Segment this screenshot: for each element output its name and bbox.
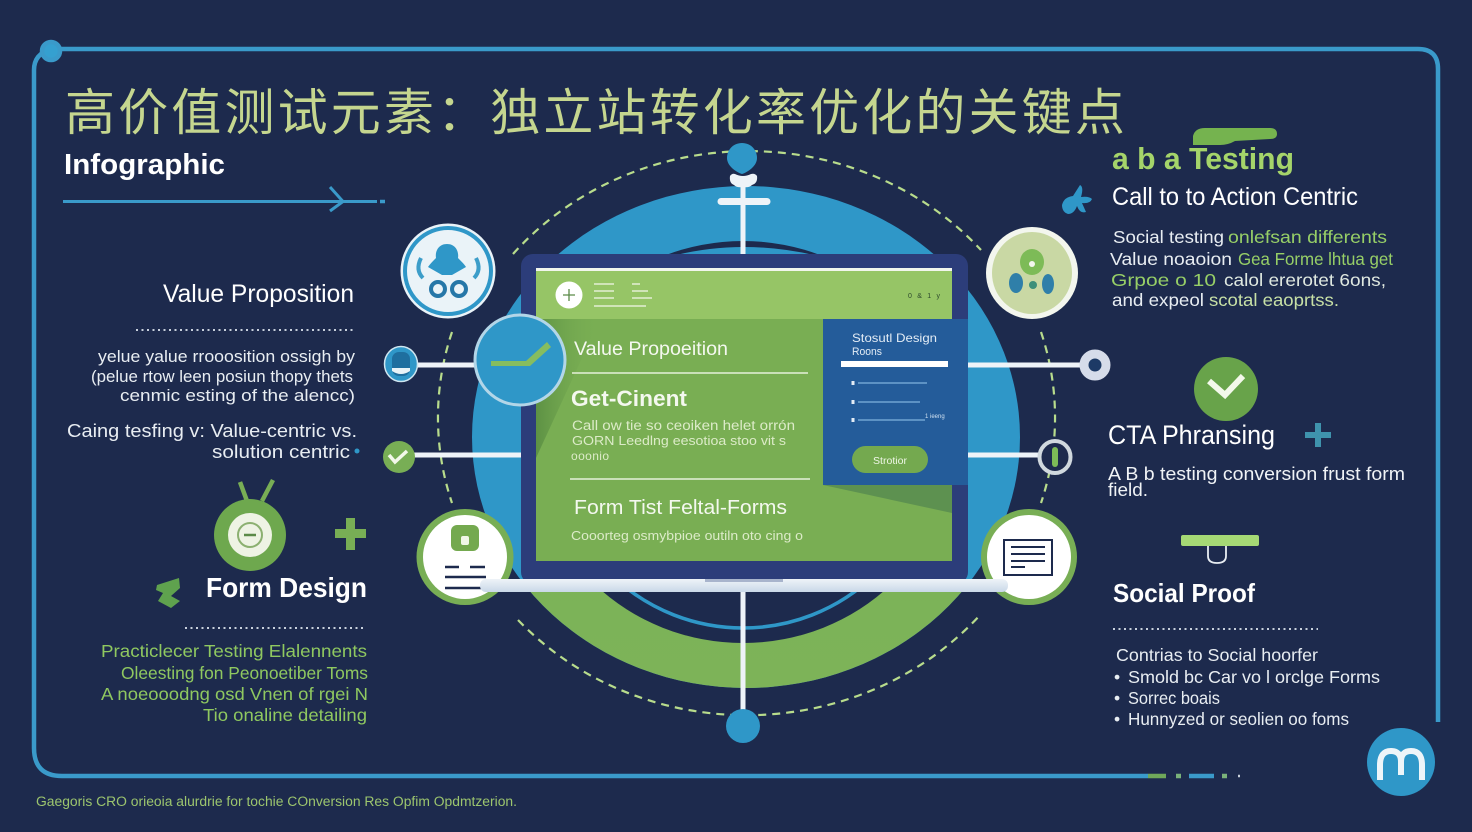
text block: form design copy: Practiclecer Testing Elalennents [101, 641, 367, 661]
icon: green check [1194, 357, 1258, 421]
icon: people badge [400, 224, 496, 318]
text block: value proposition copy: yelue yalue rrooosition ossigh by [98, 347, 356, 366]
text block: cta copy: field. [1108, 480, 1148, 500]
heading: social proof: Social Proof [1113, 578, 1255, 608]
icon: green squiggle [156, 578, 180, 608]
screen headings and copy: Get-Cinent [571, 386, 688, 411]
icon: document badge left [416, 509, 514, 605]
text block: ab testing copy [1110, 227, 1393, 310]
text block: ab testing copy: and expeol [1112, 290, 1204, 310]
laptop [521, 254, 968, 584]
form panel: Strotior [873, 456, 908, 467]
text block: cta copy [1108, 464, 1405, 500]
panel: form design [101, 572, 368, 725]
icon: small green check [383, 441, 415, 473]
panel: value proposition [67, 280, 360, 462]
heading: ab testing: a b a Testing [1112, 141, 1294, 176]
form panel: Stosutl Design [852, 331, 937, 345]
text block: social proof copy: • [1114, 667, 1120, 687]
dashed orbit [438, 151, 1055, 715]
heading: cta phrasing: CTA Phransing [1108, 420, 1275, 450]
text block: value proposition copy: solution centric [212, 442, 350, 462]
icon: small blue node [384, 346, 418, 382]
icon: green persona badge [986, 227, 1078, 319]
text block: social proof copy: • [1114, 688, 1120, 708]
laptop base [480, 579, 1008, 592]
screen headings and copy: Value Propoeition [574, 339, 728, 360]
icon: right ring node [1084, 354, 1106, 376]
text block: ab testing copy: Grpoe o 10 [1111, 270, 1216, 290]
node: bottom [726, 709, 760, 743]
screen headings and copy: Call ow tie so ceoiken helet orrón [572, 418, 795, 433]
screen header: 0 & 1 y [908, 293, 940, 300]
title: 高价值测试元素：独立站转化率优化的关键点 [65, 85, 1128, 141]
text block: social proof copy: Smold bc Car vo l orclge Forms [1128, 667, 1380, 687]
screen headings and copy: ooonio [571, 449, 609, 463]
text block: social proof copy: Sorrec boais [1128, 688, 1220, 708]
icon: green tab [1193, 128, 1277, 145]
icon: form target [214, 480, 286, 571]
central circle graphic [472, 186, 1020, 688]
icon: blue butterfly [1062, 185, 1092, 214]
form panel [823, 319, 968, 485]
screen headings and copy [570, 339, 810, 543]
form panel: Roons [852, 346, 882, 358]
text block: social proof copy: Hunnyzed or seolien oo foms [1128, 709, 1349, 729]
screen header [556, 282, 940, 308]
text block: value proposition copy: Caing tesfing v: Value-centric vs. [67, 421, 357, 441]
text block: form design copy [101, 641, 368, 725]
subheading: call to action: Call to to Action Centric [1112, 183, 1358, 211]
footer note: Gaegoris CRO orieoia alurdrie for tochie COnversion Res Opfim Opdmtzerion. [36, 794, 517, 809]
heading: value proposition: Value Proposition [163, 280, 354, 308]
icon: check on blue disc [475, 315, 565, 405]
text block: social proof copy: Contrias to Social hoorfer [1116, 645, 1318, 665]
icon: document badge right [981, 509, 1077, 605]
text block: cta copy: A B b testing conversion frust form [1108, 464, 1405, 484]
logo badge [1367, 728, 1435, 796]
arrow: subtitle rule [63, 187, 385, 211]
text block: ab testing copy: Value noaoion [1110, 249, 1232, 269]
panel: cta phrasing [1108, 420, 1405, 500]
screen headings and copy: Form Tist Feltal-Forms [574, 497, 787, 519]
laptop screen [536, 268, 952, 561]
text block: ab testing copy: Gea Forme lhtua get [1238, 249, 1393, 269]
screen headings and copy: Cooorteg osmybpioe outiln oto cing o [571, 528, 803, 543]
text block: form design copy: A noeooodng osd Vnen of rgei N [101, 684, 368, 704]
text block: value proposition copy: cenmic esting of the alencc) [120, 386, 355, 405]
text block: ab testing copy: calol ererotet 6ons, [1224, 270, 1386, 290]
text block: ab testing copy: onlefsan differents [1228, 227, 1387, 247]
icon: lower right ring node [1040, 441, 1070, 473]
icon: teal cross [1305, 423, 1331, 447]
panel: ab testing [1062, 128, 1393, 310]
text block: value proposition copy [67, 347, 357, 462]
icon: green bar with hook [1181, 535, 1259, 563]
panel: social proof [1113, 578, 1380, 729]
text block: social proof copy: • [1114, 709, 1120, 729]
text block: value proposition copy: (pelue rtow leen posiun thopy thets [91, 367, 353, 386]
text block: form design copy: Oleesting fon Peonoetiber Toms [121, 663, 368, 683]
connector lines [413, 185, 1085, 712]
form panel: 1 ieeng [925, 414, 945, 420]
text block: ab testing copy: Social testing [1113, 227, 1224, 247]
heading: form design: Form Design [206, 572, 367, 603]
screen headings and copy: GORN Leedlng eesotioa stoo vit s [572, 433, 787, 448]
subtitle: Infographic [64, 149, 225, 181]
text block: social proof copy [1114, 645, 1380, 729]
icon: plus [335, 518, 366, 550]
text block: ab testing copy: scotal eaoprtss. [1209, 290, 1339, 310]
node: top [727, 143, 757, 187]
text block: form design copy: Tio onaline detailing [203, 705, 367, 725]
